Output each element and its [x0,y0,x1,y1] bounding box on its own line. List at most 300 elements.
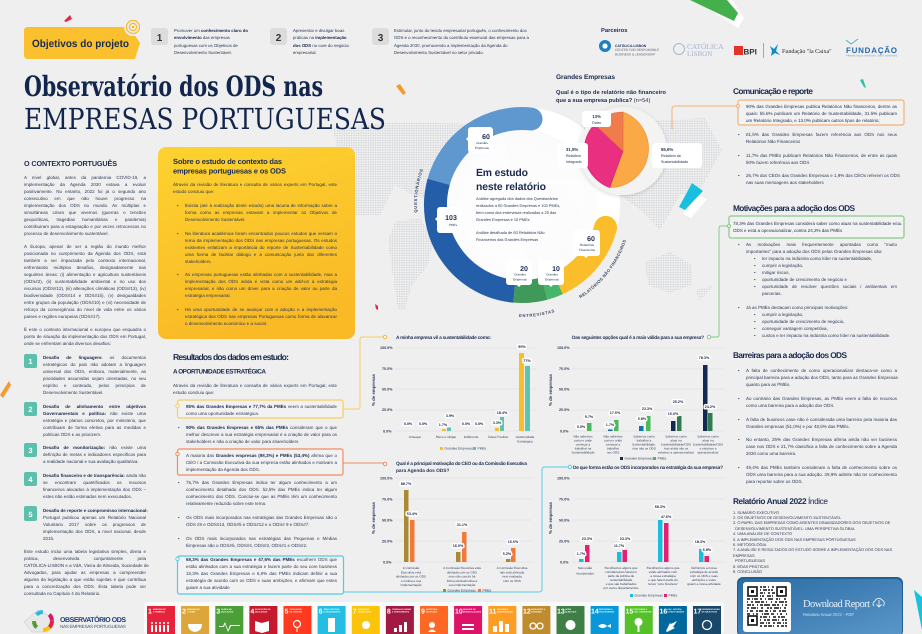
chart 3: CEO motivation: 50.0% [382,518,393,522]
pie chips: 13% [592,114,601,119]
motivations sublist 1: ter impacto na indústria como líder na sustentabilidade, [762,256,872,260]
study bullet 2: existentes enfatizam a importância do reporte de Sustentabilidade como [185,244,337,250]
SDG strip: ERRADICAR [153,608,166,611]
barrier bullet 1: quanto para as PMEs. [746,382,791,386]
chart 4: SDG incorporation: 0.0% [560,560,569,564]
text: context paragraph 1: implementação dos ODS no mundo. As múltiplas e [24,202,146,208]
SDG strip: ÁGUA POTÁVEL [324,608,341,611]
SDG strip: ERRADICAR [187,608,200,611]
result bullet: knowledge: conhecimento detalhado dos ODS. 52,5% das PMEs indica ter algum [186,486,337,492]
barrier bullet 4: No entanto, 25% das Grandes Empresas afirma ainda não ver business [746,436,897,442]
motivations sublist 2: conseguir vantagem competitiva, [762,326,828,330]
motivations sublist 1: parcerias. [762,290,782,296]
chart 1: sustainability view: Indiferente [464,435,479,439]
barrier bullet 3 [738,416,897,429]
chart 3: CEO motivation: A Comissão [403,566,420,570]
chart 2: most valid option: 100.0% [557,346,570,350]
motivations sublist 2: custos e ter impacto na indústria como líder na sustentabilidade. [762,332,890,338]
partner logos: Fundação "la Caixa" [782,48,832,55]
curved ring labels: RELATÓRIOS NÃO FINANCEIROS [579,240,626,298]
challenge 3: definição de metas e indicadores específicos para [43,452,146,457]
ring number labels: 10 [552,266,560,273]
chart 2: most valid option: 0.0% [560,430,569,434]
SDG strip: RENOVÁVEIS [358,610,372,614]
study bullet 2 [177,230,337,264]
chart 4: SDG incorporation: Escolhemos alguns que [647,566,680,570]
SDG strip: 11 [489,608,497,616]
barrier bullet 1: principal barreira para a adoção dos ODS, tanto para as Grandes Empresas [746,374,898,380]
text: context paragraph 1: processo de desenvolvimento sustentável. [24,230,109,236]
ring number labels: 60 [587,236,595,243]
partner logos [599,39,897,58]
chart 4: SDG incorporation: 47.6% [661,515,672,519]
SDG strip: 13 [557,608,565,616]
chart 2: most valid option: Sustentabilidade/ODS [661,442,691,446]
chart 4: SDG incorporation: De que forma estão os ODS incorporados na estratégia da sua empresa? [573,465,723,471]
barrier bullet 2: como uma barreira para a adoção dos ODS. [746,402,835,408]
connector: orange [176,449,387,475]
chart 3: CEO motivation: 25.0% [382,540,393,544]
motivations sublist 2: oportunidade de crescimento de negócio, [762,318,845,324]
title: Observatório dos ODS nas [24,70,323,103]
result bullet: knowledge: conhecimento dos ODS. Conclui-se que as PMEs têm um conhecimento [186,494,337,498]
communication bullet 1 [738,132,897,144]
objective 1 text: Desenvolvimento Sustentável. [174,50,232,55]
ring number labels: Empresas [545,278,559,282]
barrier bullet 5: 49,4% das PMEs também consideram a falta de conhecimento sobre os [746,464,897,470]
connector: light orange [672,100,904,129]
pie chart [579,107,667,195]
chart 2: most valid option: 17.5% [610,411,621,415]
text: donut description: bem como das entrevistas realizadas a 20 das [476,210,556,214]
chart 2: most valid option: 26.2% [673,400,684,404]
ring number labels: Empresas [475,146,489,150]
footer logo [24,610,126,632]
SDG strip: QUALIDADE [221,610,234,614]
SDG strip: 15 [626,608,633,616]
chart 3: CEO motivation: A Comissão Executiva [497,566,528,570]
result highlight 3 [186,556,337,590]
chart 2: most valid option: 9.7% [585,415,594,419]
chart 2: most valid option: começar a [606,442,620,446]
SDG strip: AÇÃO [565,608,572,611]
panel: download report: Download Report [803,599,870,610]
SDG strip: DE GÉNERO [290,610,302,614]
report index: 2. OS OBJETIVOS DE DESENVOLVIMENTO SUSTENTÁVEL [733,515,841,520]
result bullet: SME SDGs: Empresas são o ODS#5, ODS#4, ODS#3, ODS#1 e ODS#2. [186,542,307,548]
study bullet 3: implementação dos ODS ainda é vista como um add-on à estratégia [185,278,337,284]
SDG strip: 2 [182,608,186,616]
pie chips: 31,5% [566,147,578,152]
SDG strip: 9 [421,608,425,616]
challenge number badges: 4 [28,475,33,484]
communication bullet 1: Relatórios Não Financeiros [746,138,800,144]
objective 2 text: dos ODS no core do negócio [293,43,349,48]
motivations sublist 1: oportunidade de crescimento de negócio e [762,276,847,282]
chart 2: most valid option: 15.0% [668,412,679,416]
challenge 2: estratégia e planos concretos, por ministério, que [43,418,146,422]
report index [733,510,903,574]
report index: 4. UMA ANÁLISE DE CONTEXTO [733,531,792,536]
chart 3: CEO motivation: 0.0% [383,560,392,564]
challenge 4: financeiros alocados à implementação dos ODS – [43,487,146,492]
text: donut description: Financeiros das Grandes Empresas [476,236,538,242]
ring number labels: 103 [445,215,457,222]
pie chips: Integrado [566,160,582,164]
donut centre heading: Em estudo [476,168,528,179]
result bullet: knowledge: relativamente reduzido sobre este tema. [186,500,266,506]
SDG strip: 6 [319,608,323,616]
barrier bullet 2: Ao contrário das Grandes Empresas, as PMEs veem a falta de recursos [746,396,897,400]
study bullet 1 [177,202,337,222]
challenge 3: Desafio de monitorização: não existe uma [43,445,146,450]
challenge 2: políticas ODS e as priorizem. [43,432,101,436]
text: study panel intro [173,182,337,194]
panel: study context: Sobre o estudo de contexto das [173,157,282,166]
objective 3 text: ODS e o reconhecimento do contributo essencial das empresas para a [394,35,529,40]
SDG strip: DESIGUALDADES [463,610,482,614]
text: legislative table note: consultada no Capítulo 4 do Relatório. [24,591,101,596]
chart 4: SDG incorporation: sustentabilidade [610,578,632,582]
barrier bullet 4: case nos ODS e 21,7% classifica a falta de conhecimento sobre a Agenda [746,444,897,448]
barrier bullet 5 [746,464,897,484]
barrier bullet 1 [738,368,898,387]
right column headings [733,86,855,506]
chart 3: CEO motivation: forma efetiva/motiva a [447,579,477,583]
chart 4: SDG incorporation: parte da política de [608,574,634,578]
SDG strip: 10 [455,608,463,616]
chart 1: sustainability view: Estratégica [517,440,533,444]
dotted world map [333,118,722,310]
result bullet: large company SDGs: Os ODS mais incorporados nas estratégias das Grandes Empresas são o [186,514,337,520]
SDG strip: PROTEGER A [634,608,648,611]
report index: 3. O PAPEL DAS EMPRESAS COMO AGENTES DINAMIZADORES DOS OBJETIVOS DE [733,520,890,525]
chart 4: SDG incorporation: ambições e estes [692,578,716,582]
study bullet 1: Existia (até à realização deste estudo) uma lacuna de informação sobre a [185,202,337,208]
SDG strip: OS OBJETIVOS [702,610,718,614]
pie chips [558,111,702,168]
text: context paragraph 2: também a ser impactada pelo contexto internacional, [24,258,146,262]
communication highlight [746,104,897,123]
chart 3: CEO motivation: % de empresas [371,501,376,534]
chart 4: SDG incorporation: incorporados [576,572,594,576]
chart 3: CEO motivation: 75.0% [382,498,393,502]
curved ring labels: ENTREVISTAS [519,310,554,317]
objective 2 text: Apresentar e divulgar boas [293,28,344,32]
communication highlight: um Relatório Integrado, e 13.0% publicam outros tipos de relatório; [746,118,880,122]
SDG strip: CIDADES E [497,608,509,611]
objective 1 text: envolvimento das empresas [174,35,230,40]
ring number labels [435,127,600,287]
result bullet: SME SDGs [178,536,337,548]
chart 3: CEO motivation: implementação [401,583,422,587]
chart 1: sustainability view: 77% [523,359,531,363]
right column headings: Relatório Anual 2022 Índice [733,496,828,506]
chart 2: most valid option: 0.0% [577,425,586,429]
challenge 1: espírito e conteúdo, pelos princípios de [43,383,146,388]
chart 2: most valid option: trabalhar na [575,446,592,450]
text: context paragraph 1: A nível global, antes da pandemia COVID-19, a [24,174,146,180]
challenge 1: Desafio de linguagem: os documentos [43,355,146,360]
chart 2: most valid option: Das seguintes opções qual é a mais válida para a sua empresa? [572,335,704,341]
ring number labels: Relatórios [580,243,594,247]
chart 2: most valid option: Não sabemos [573,434,593,438]
chart 4: SDG incorporation: a nossa estratégia [650,574,676,578]
chart 3: CEO motivation: 15.5% [508,540,519,544]
study bullet 1: forma como as empresas estavam a implementar os Objetivos de [185,210,337,214]
chart 4: SDG incorporation: PMEs [668,594,678,598]
SDG strip: CLIMÁTICA [565,610,577,614]
SDG strip: 14 [591,608,599,616]
results headings: Resultados dos dados em estudo: [173,352,289,362]
right column headings: Motivações para a adoção dos ODS [733,203,855,213]
chart 3: CEO motivation: para Agenda dos ODS? [396,468,449,474]
SDG strip: 16 [660,608,667,616]
barrier bullet 4 [738,436,897,456]
text: context paragraph 1: contribuíram para a estagnação e por vezes retrocessos no [24,224,146,228]
motivations sublist 1: mitigar riscos, [762,270,790,274]
pie chips: Relatório [566,154,581,158]
challenge number badges: 3 [28,446,33,455]
text: study panel intro: estudo concluiu que: [173,188,214,194]
chart 1: sustainability view: 0.0% [419,422,428,426]
partner logos: LISBON [687,50,712,58]
chart 1: sustainability view: Oportunidade [516,435,535,439]
chart 2: most valid option: estamos a operacionalizar [658,450,694,454]
motivations list: SMEs: Já as PMEs destacam como principais motivações: [746,304,849,310]
chart 3: CEO motivation: A Comissão Executiva está [443,566,481,570]
motivations sublist 2: cumprir a legislação, [762,312,803,316]
chart 2: most valid option: trabalhar a [637,438,652,442]
ring number labels: 20 [520,266,528,273]
SDG strip: 1 [148,608,152,616]
challenge 2: Desafio de alinhamento entre objetivos [43,404,146,408]
chart 1: sustainability view: Grandes Empresas [444,446,473,450]
partner logos: FRANCISCO MANUEL DOS SANTOS [846,55,897,58]
result highlight 1 [186,404,337,416]
challenge 2 [43,404,146,437]
challenge 1: estratégicos do país não adotam a linguagem [43,362,146,367]
grandes empresas heading: Qual é o tipo de relatório não financeiro [556,89,667,96]
challenge 5: implementação dos ODS, a nível nacional, desde [43,528,146,534]
result highlight 1: 95% das Grandes Empresas e 77,7% da PMEs veem a sustentabilidade [186,404,337,408]
communication highlight: 90% das Grandes Empresas publica Relatórios Não financeiros, dentre as [746,104,897,108]
challenge 5 [43,508,148,540]
SDG strip: 17 [694,608,701,616]
study bullet 3: estratégia empresarial. [185,292,231,298]
result highlight 1: como uma oportunidade estratégica. [186,410,259,416]
chart 4: SDG incorporation: 100.0% [557,476,570,480]
title: EMPRESAS PORTUGUESAS [24,102,386,136]
challenge 2: Governamentais e política: não existe uma [43,410,146,416]
chart 4: SDG incorporation: 11.7% [614,544,625,548]
study bullet 4: o desenvolvimento económico e a social. [185,320,267,326]
chart 1: sustainability view: 100.0% [380,346,393,350]
chart 1: sustainability view: 18.4% [497,411,508,415]
ring number labels: 60 [482,134,490,141]
text: context paragraph 2: recursos (ODS#12), (iii) alterações climáticas (ODS#13), (iv) [24,286,146,290]
challenge number badges: 5 [28,510,33,519]
chart 2: most valid option: 25.0% [559,408,570,412]
text: donut description: realizados a 60 Grandes Empresas e 103 PMEs, [476,202,560,208]
result bullet: knowledge: 76,7% das Grandes Empresas indica ter algum conhecimento a um [186,480,337,484]
right column headings: Barreiras para a adoção dos ODS [733,350,847,360]
chart 3: CEO motivation: 100.0% [380,476,393,480]
report index: PORTUGUESAS [735,558,765,563]
text: context paragraph 3: É este o contexto internacional e europeu que enquadra o [24,326,146,332]
text: legislative table note: alguma da legislação a que estão sujeitas e que contribua [24,577,146,582]
SDG strip: 5 [284,608,288,616]
chart 2: most valid option: atuar na [702,438,714,442]
text: results intro: Através da revisão de literatura e consulta de vários experts em Portugal, este [173,382,337,388]
SDG strip: E CRESCIMENTO [392,610,410,614]
report index: 1. SUMÁRIO EXECUTIVO [733,510,779,514]
objective 2 text: práticas na implementação [293,35,347,40]
chart 1: sustainability view: 25.0% [382,408,393,412]
partner logos: CATÓLICA [687,42,724,51]
challenge 1: prioridades assumidas sejam orientadas, no seu [43,376,146,381]
chart 2: most valid option: operacionalizar [698,450,718,454]
chart 2: most valid option: 24.2% [705,405,716,409]
chart 4: SDG incorporation: 6.8% [703,548,712,552]
chart 1: sustainability view: Risco a mitigar [436,435,456,439]
connector: yellow [176,335,387,418]
chart 3: CEO motivation: nem motivada [502,575,522,579]
chart 4: SDG incorporation: 1.7% [577,552,586,556]
motivations sublist 1: oportunidade de resolver questões sociais / ambientais em [762,284,897,288]
text: context paragraph 2: países e regiões europeias (ODS#17). [24,314,101,318]
panel: download report [737,577,903,634]
text: context paragraph 2: reforço da convergência do nível de vida entre os vários [24,306,146,312]
chart 1: sustainability view: Talvez Positivo [488,435,509,439]
chart 3: CEO motivation: 31.1% [457,523,468,527]
result highlight 2: implementação da Agenda dos ODS. [186,466,260,472]
results headings: A OPORTUNIDADE ESTRATÉGICA [173,368,266,376]
text: results intro: estudo concluiu que: [173,390,214,394]
chart 4: SDG incorporation: com os ODS e suas [690,574,718,578]
chart 1: sustainability view: 1.7% [439,423,448,427]
report index: DESENVOLVIMENTO SUSTENTÁVEL: UMA PERSPETIVA GLOBAL [735,526,855,531]
chart 3: CEO motivation: 53.4% [407,512,418,516]
SDG strip: CONSUMO [531,610,542,614]
result highlight 2: CEO / a Comissão Executiva da sua empresa estão alinhados e motivam a [186,460,337,464]
challenge 1 [43,355,146,395]
result bullet: large company SDGs: ODS #8 e ODS#13, ODS#5 e ODS#12 e o ODS# 9 e ODS#7. [186,522,310,526]
objective 1 text: portuguesas com os Objetivos de [174,43,238,48]
result bullet: value creation: 90% das Grandes Empresas e 65% das PMEs consideram que o que [186,424,337,430]
chart 3: CEO motivation: 5.2% [503,552,512,556]
barrier bullet 1: A falta de conhecimento de como operacionalizar destaca-se como a [746,368,897,372]
objective 2 text [293,28,349,55]
curved ring labels: QUESTIONÁRIOS [414,169,423,212]
objective 3 text: Agenda 2030, promovendo a implementação da Agenda do [394,43,507,48]
SDG strip: 12 [523,608,531,616]
icon: QR code [747,587,787,626]
partners heading: Parceiros [601,27,627,34]
chart 2: most valid option: Sustentabilidade/ODS [693,442,723,446]
partner logos: BUSINESS & LEADERSHIP [615,52,655,56]
chart 1: sustainability view [371,335,537,450]
study bullet 3: empresarial, e não como um driver para a criação de valor ou parte da [185,286,337,290]
chart 1: sustainability view: 0.0% [404,422,413,426]
report index: 9. CONCLUSÃO [733,569,762,574]
chart 1: sustainability view: A minha empresa vê a sustentabilidade como: [396,335,491,341]
connector: green [707,216,904,339]
step numbers: 1 [157,33,163,44]
result bullet: knowledge [178,480,337,506]
chart 4: SDG incorporation: 50.0% [559,518,570,522]
challenge number badges [24,354,37,521]
panel: study context [158,147,355,339]
ring number labels: PMEs [449,223,458,227]
chart 4: SDG incorporation: 23.3% [620,537,631,541]
communication bullet 2 [738,152,897,164]
challenge 5: Desafio de reporte e compromisso internacional: [43,508,148,512]
motivations list: large companies: importantes" para a adoção dos ODS pelas Grandes Empresas são: [746,248,882,254]
pie chips: Relatório de [661,154,681,158]
objective 1 text [174,28,248,55]
communication bullet 2: 11,7% das PMEs publicam Relatórios Não Financeiros, de entre as quais [746,152,897,158]
text: legislative table note: Este estudo inclui uma tabela legislativa simples, direta e [24,549,146,554]
step numbers [151,28,389,45]
study bullet 4: estratégica dos ODS nas empresas Portuguesas como forma de alavancar [185,314,337,318]
objective 2 text: empresarial. [293,50,317,55]
SDG strip: PROTEGER A [599,608,613,611]
results headings [173,352,289,376]
step numbers: 3 [378,33,384,44]
barrier bullet 5: ODS uma barreira para a sua adoção. 39,9% admite não ter conhecimento [746,472,897,476]
challenge 3: a realidade nacional e sua avaliação qualitativa. [43,459,139,464]
chart 3: CEO motivation: com os ODS [503,579,521,583]
barrier bullet 5: para reportar sobre os ODS. [746,478,803,484]
motivations sublist 1: cumprir a legislação, [762,262,803,268]
result bullet: large company SDGs [178,514,337,527]
challenge number badges: 1 [28,357,33,366]
chart 3: CEO motivation: PMEs [482,588,492,592]
partner logos: FUNDAÇÃO [846,45,897,55]
SDG strip: REDUZIR AS [463,608,476,611]
grandes empresas heading: Grandes Empresas [556,74,615,81]
text: context paragraph 3 [24,326,146,346]
study bullet 2: Na literatura académica foram encontrados poucos estudos que versam o [185,230,337,236]
SDG strip: TRABALHO DIGNO [392,608,411,611]
chart 2: most valid option: Sabemos como [665,434,687,438]
chart 2: most valid option: Não sabemos [603,434,623,438]
report index: 5. A IMPLEMENTAÇÃO DOS ODS NAS EMPRESAS PORTUGUESAS [733,537,856,542]
challenge 4: se encontram quantificados os recursos [43,480,146,485]
SDG strip: INOVAÇÃO [426,610,437,614]
result highlight 3: estão alinhados com a sua estratégia e fazem parte do seu core business [186,564,337,568]
chart 2: most valid option: PMEs [658,456,667,460]
SDG strip: A FOME [187,610,196,614]
SDG strip [144,602,724,634]
chart 2: most valid option: 75.0% [559,367,570,371]
motivations highlight [733,220,902,233]
barrier bullet 2 [738,396,897,408]
challenge 5: Voluntário 2017 sobre os progressos de [43,522,146,526]
heading: context: O CONTEXTO PORTUGUÊS [24,159,117,168]
chart 1: sustainability view: 75.0% [382,367,393,371]
chart 1: sustainability view: Ameaçar [409,435,421,439]
study bullet 2: tema da implementação dos ODS nas empresas portuguesas. Os estudos [185,238,337,242]
chart 4: SDG incorporation: 18.3% [695,540,706,544]
SDG strip: E SANEAMENTO [324,610,341,614]
objectives badge: Objetivos do projeto [32,38,129,50]
report index: 8. BOAS PRÁTICAS [733,564,769,569]
motivations sublist 1 [754,256,897,296]
curved ring labels [414,169,626,317]
chart 3: CEO motivation: Executiva está [401,570,421,574]
